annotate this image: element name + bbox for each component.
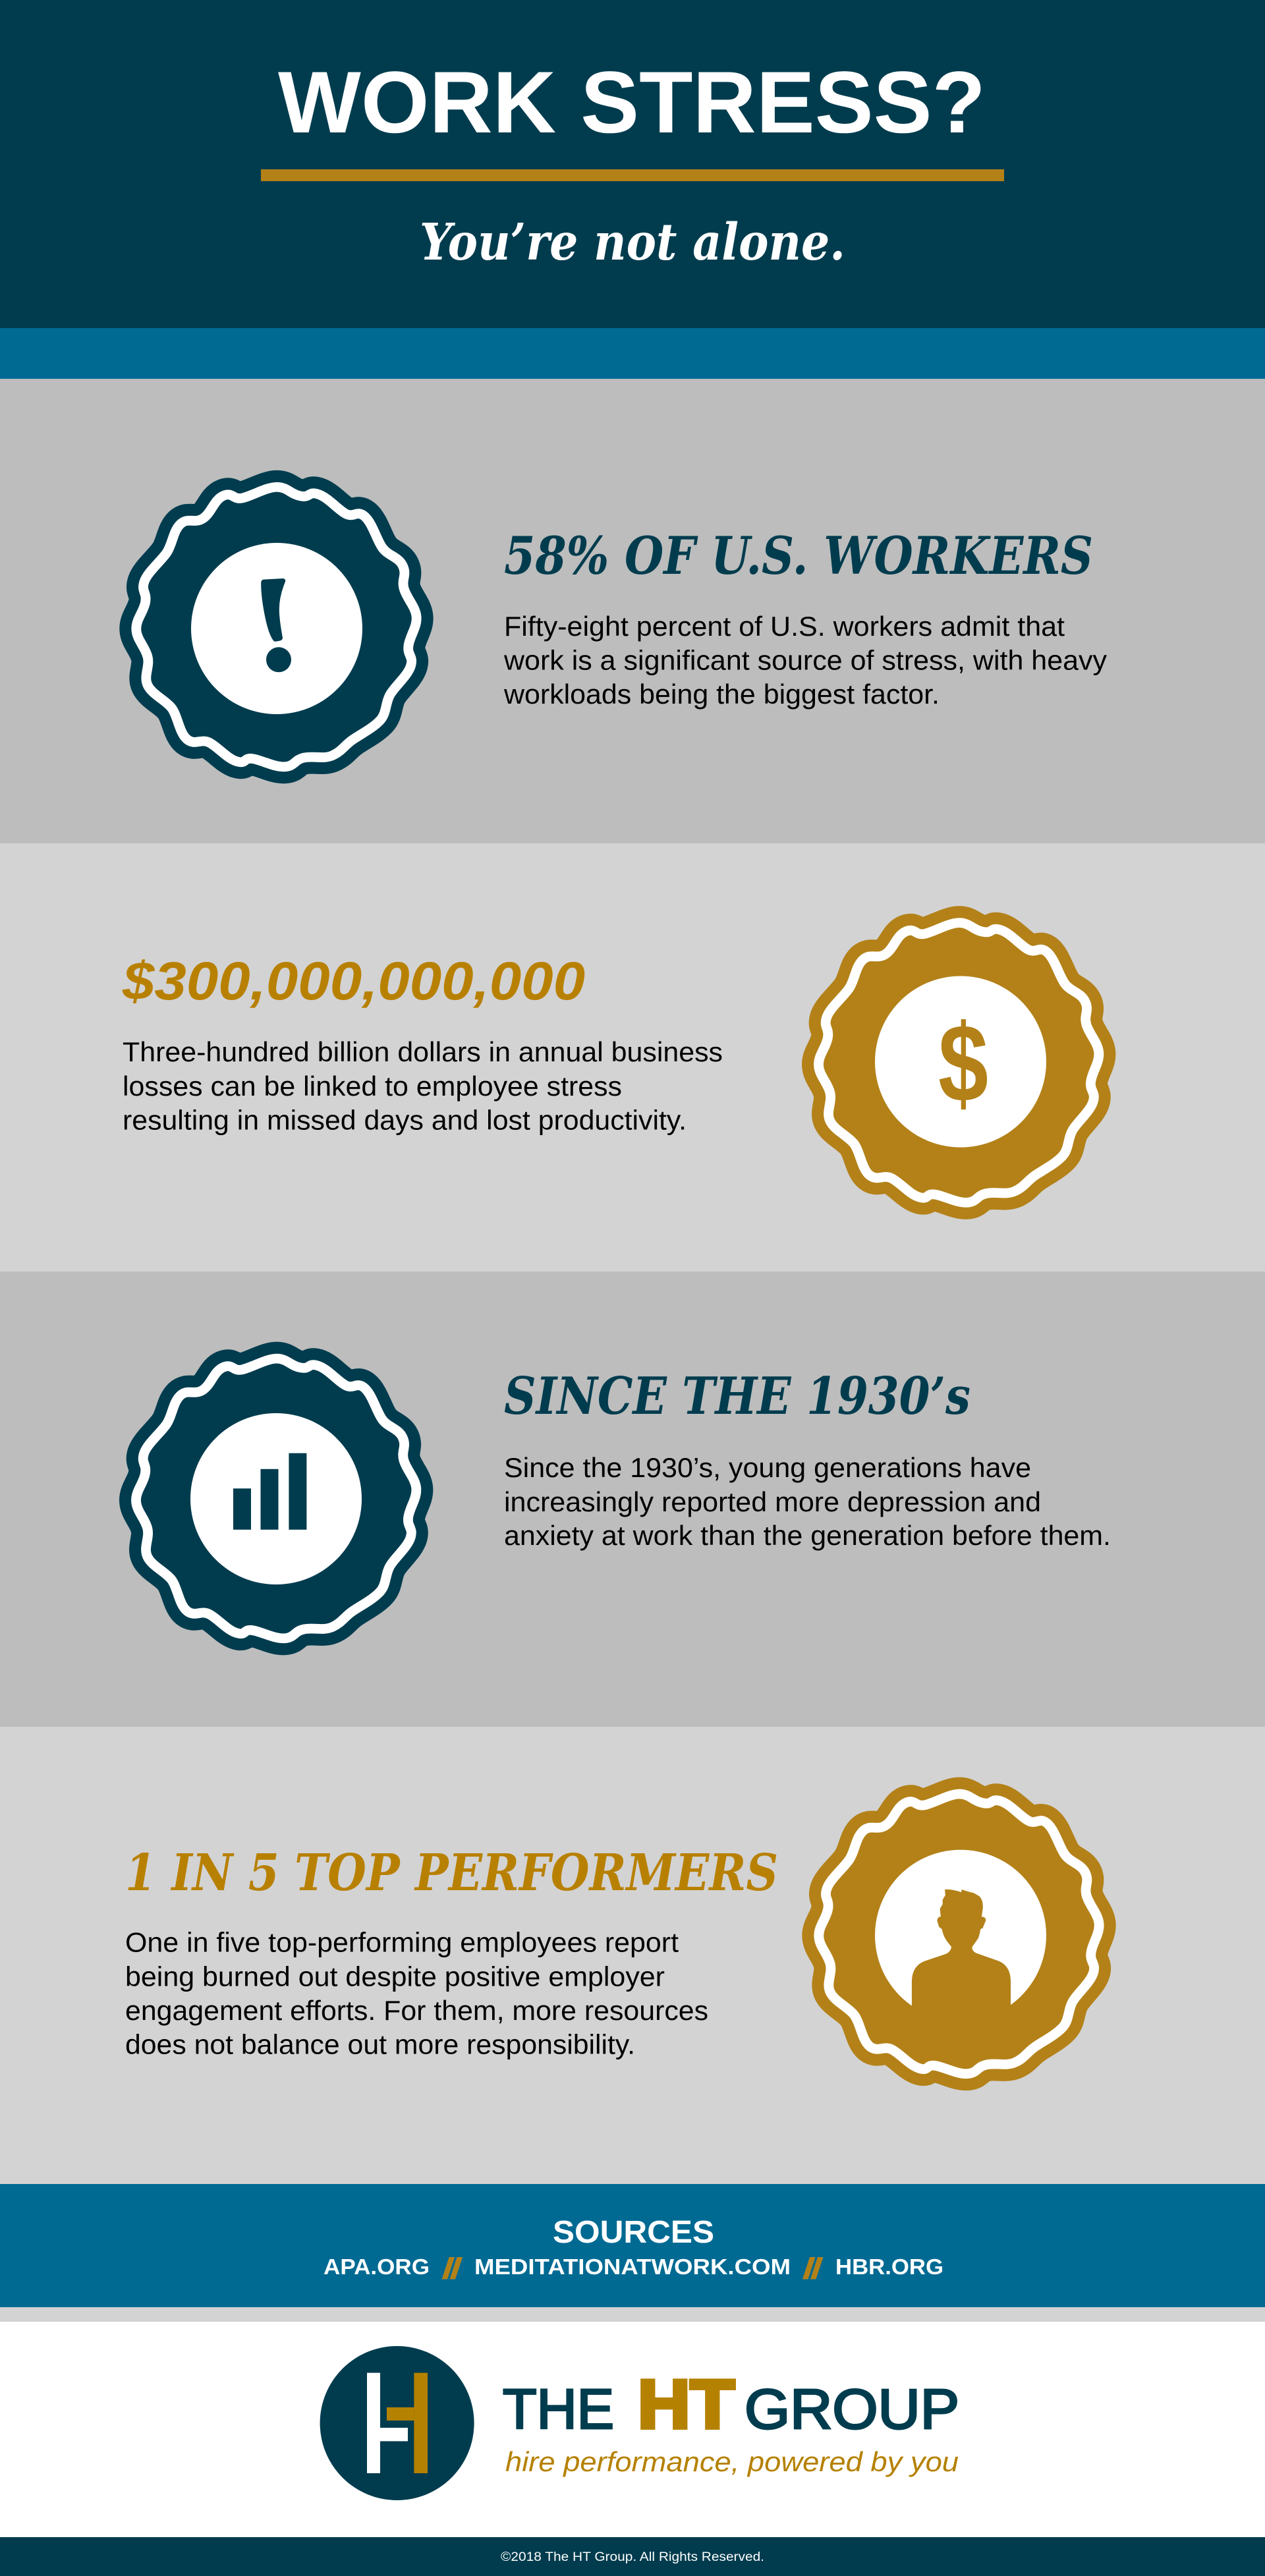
logo mark	[320, 2346, 474, 2500]
copyright: ©2018 The HT Group. All Rights Reserved.	[501, 2550, 764, 2564]
logo wordmark: HT	[638, 2366, 735, 2443]
body text: increasingly reported more depression and	[504, 1486, 1041, 1517]
body text: anxiety at work than the generation before them.	[504, 1520, 1111, 1551]
icon: exclamation badge	[136, 487, 416, 767]
icon: person badge	[819, 1794, 1099, 2074]
body text: One in five top-performing employees report	[125, 1927, 679, 1958]
panel: footer	[0, 2537, 1265, 2576]
heading: 1 IN 5 TOP PERFORMERS	[125, 1843, 778, 1903]
heading: $300,000,000,000	[122, 951, 585, 1011]
body text: being burned out despite positive employer	[125, 1961, 665, 1992]
heading: 58% OF U.S. WORKERS	[504, 525, 1093, 586]
body text: Since the 1930’s, young generations have	[504, 1452, 1031, 1483]
logo wordmark: GROUP	[745, 2378, 959, 2441]
body text	[125, 1927, 708, 2060]
body text	[503, 611, 1107, 710]
body text	[123, 1036, 723, 1136]
icon: dollar badge	[818, 923, 1099, 1202]
blue band	[0, 328, 1265, 379]
panel: $300 billion	[0, 843, 1265, 1272]
panel: 58% of workers	[0, 379, 1265, 843]
separator	[442, 2257, 463, 2280]
source: apa.org: APA.ORG	[323, 2254, 430, 2279]
body text: Fifty-eight percent of U.S. workers admit that	[504, 611, 1065, 642]
separator	[802, 2257, 823, 2280]
source: hbr.org: HBR.ORG	[835, 2254, 943, 2279]
panel: sources	[0, 2184, 1265, 2307]
body text: losses can be linked to employee stress	[123, 1071, 622, 1102]
title: WORK STRESS?	[278, 54, 986, 152]
subtitle: You’re not alone.	[420, 213, 845, 272]
icon: bar chart badge	[136, 1358, 416, 1638]
panel: header	[0, 0, 1265, 328]
body text: work is a significant source of stress, with heavy	[503, 644, 1107, 676]
body text: workloads being the biggest factor.	[503, 679, 940, 710]
logo wordmark	[503, 2366, 959, 2443]
body text: resulting in missed days and lost productivity.	[123, 1104, 687, 1136]
logo tagline: hire performance, powered by you	[505, 2446, 959, 2477]
body text: Three-hundred billion dollars in annual business	[123, 1036, 723, 1067]
body text: engagement efforts. For them, more resources	[125, 1995, 708, 2026]
panel: logo	[0, 2322, 1265, 2537]
logo wordmark: THE	[503, 2378, 614, 2441]
panel: since the 1930s	[0, 1272, 1265, 1727]
body text	[504, 1452, 1111, 1551]
body text: does not balance out more responsibility.	[125, 2029, 635, 2060]
heading: SINCE THE 1930’s	[504, 1366, 970, 1426]
icon: dollar badge: $	[938, 1001, 988, 1125]
gray strip	[0, 2307, 1265, 2322]
source: meditationatwork.com: MEDITATIONATWORK.COM	[474, 2254, 791, 2279]
panel: 1 in 5 top performers	[0, 1727, 1265, 2184]
sources heading: SOURCES	[553, 2215, 714, 2250]
title underline	[261, 169, 1004, 181]
